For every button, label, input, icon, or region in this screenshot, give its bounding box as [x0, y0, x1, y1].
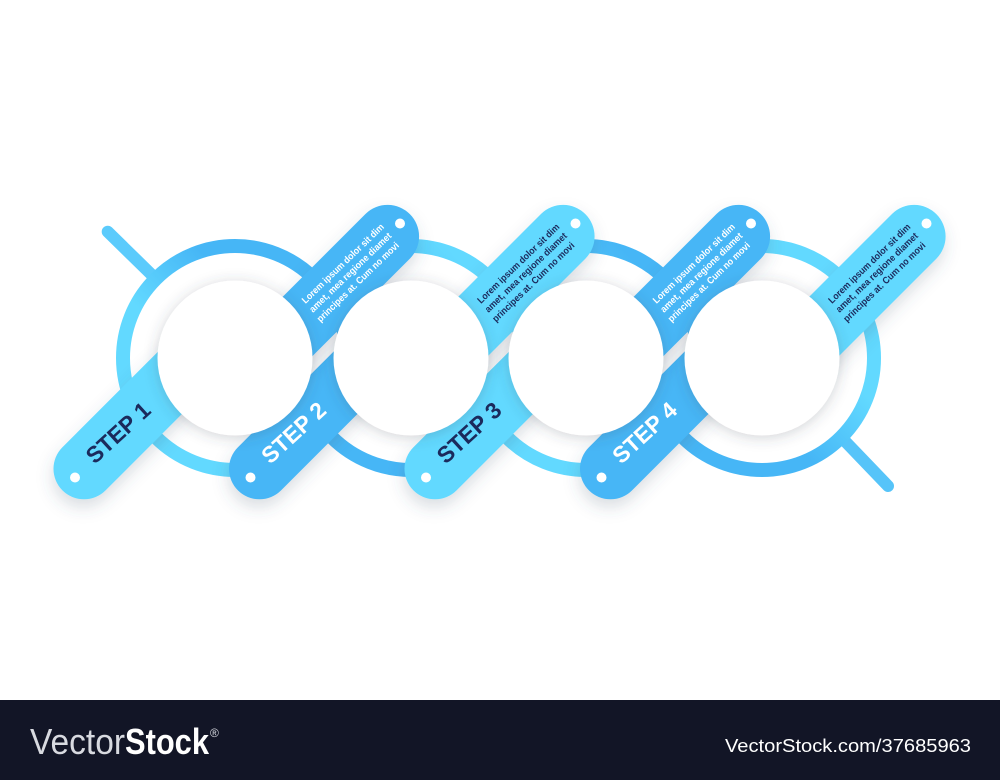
circle 4	[684, 280, 840, 436]
text block 1: amet, mea regione diamet	[307, 230, 395, 315]
dot: text tab 4	[922, 218, 932, 228]
logo wordmark: Stock	[125, 721, 210, 762]
text block 4: amet, mea regione diamet	[834, 230, 921, 315]
text block 1: principes at. Cum no movi	[315, 240, 402, 325]
text block 2: principes at. Cum no movi	[490, 240, 577, 325]
label: step 3: STEP 3	[432, 397, 507, 469]
ring 2	[299, 246, 523, 470]
tab: step 1	[53, 342, 211, 499]
text block 3: amet, mea regione diamet	[658, 230, 746, 315]
ring 4	[650, 246, 874, 470]
dot: step 4	[596, 472, 606, 482]
dot: text tab 2	[570, 218, 580, 228]
text block 2: amet, mea regione diamet	[483, 230, 570, 315]
circle 1	[158, 280, 312, 436]
circle 2	[334, 280, 488, 436]
text block 3: Lorem ipsum dolor sit dim	[651, 222, 738, 306]
logo wordmark	[30, 721, 219, 762]
text tab 2	[436, 205, 595, 363]
dot: text tab 3	[746, 218, 756, 228]
text block 2: Lorem ipsum dolor sit dim	[475, 222, 562, 306]
logo wordmark: ®	[210, 726, 219, 740]
tab: step 4	[580, 342, 737, 499]
white circles	[158, 280, 840, 436]
ring 1	[123, 246, 347, 470]
dot: step 1	[70, 472, 80, 482]
label: step 2: STEP 2	[256, 397, 331, 469]
circle 3	[508, 280, 664, 436]
top-left connector line	[108, 232, 156, 279]
tab dots	[70, 218, 932, 482]
ring 3	[474, 246, 698, 470]
text tab 3	[612, 205, 770, 363]
text tab 4	[787, 205, 946, 363]
text block 3: principes at. Cum no movi	[666, 240, 753, 325]
bottom-right connector line	[841, 437, 888, 486]
upper text tabs	[261, 205, 946, 363]
logo wordmark: Vector	[30, 721, 125, 762]
dot: step 2	[246, 472, 256, 482]
tab: step 2	[229, 342, 386, 499]
lower step tabs	[53, 342, 737, 499]
text block 4: Lorem ipsum dolor sit dim	[826, 222, 913, 306]
text tab 1	[261, 205, 419, 363]
tab: step 3	[404, 342, 562, 499]
step labels	[81, 397, 682, 469]
text block 1: Lorem ipsum dolor sit dim	[300, 222, 387, 306]
footer bar	[0, 700, 1000, 780]
rings and connector lines	[108, 232, 888, 486]
dot: text tab 1	[395, 218, 405, 228]
image id: VectorStock.com/37685963	[725, 736, 971, 756]
text block 4: principes at. Cum no movi	[841, 240, 928, 325]
label: step 1: STEP 1	[81, 397, 156, 469]
label: step 4: STEP 4	[607, 397, 682, 469]
dot: step 3	[421, 472, 431, 482]
